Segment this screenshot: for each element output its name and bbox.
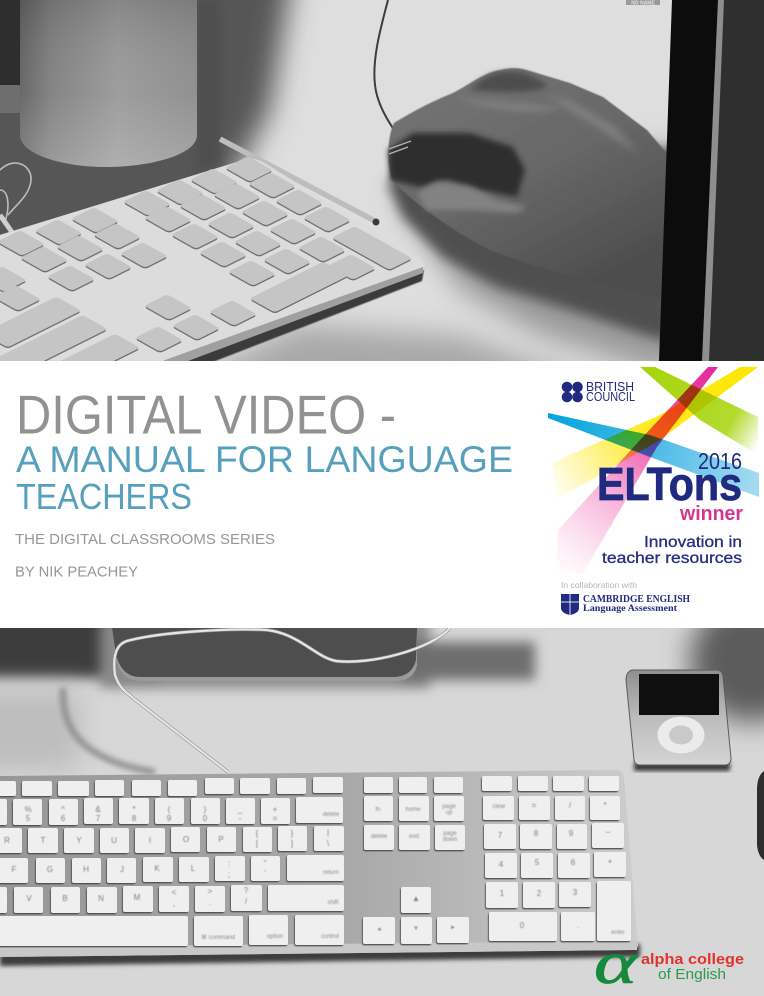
ELTons wordmark: [597, 448, 743, 525]
key legends: .: [209, 898, 211, 907]
key legends: shift: [327, 900, 339, 906]
award category: [602, 534, 742, 567]
key legends: +: [608, 857, 613, 866]
keyboard cable: [114, 628, 450, 772]
keys: [0, 157, 410, 361]
key legends: 4: [499, 860, 504, 869]
iPod: [626, 670, 731, 771]
key legends: 5: [535, 858, 540, 867]
key legends: N: [98, 894, 104, 903]
title: TEACHERS: [16, 476, 192, 517]
monitor edge: NO NAME: [631, 0, 655, 6]
key legends: ": [264, 859, 267, 868]
key legends: K: [154, 864, 160, 873]
key legends: V: [26, 894, 32, 903]
Alpha College of English logo: alpha college: [641, 952, 744, 968]
bottom keyboard: [0, 770, 638, 957]
key legends: &: [95, 805, 101, 814]
award category: Innovation in: [644, 534, 742, 551]
key legends: ;: [228, 870, 230, 879]
key legends: fn: [375, 807, 381, 813]
key legends: home: [405, 807, 421, 813]
key legends: }: [291, 829, 294, 838]
key legends: .: [577, 921, 579, 930]
key legends: enter: [611, 930, 625, 936]
key legends: Y: [76, 836, 82, 845]
key legends: 7: [96, 814, 101, 823]
key legends: ^: [61, 805, 65, 814]
key legends: J: [120, 865, 124, 874]
Cambridge English logo: Language Assessment: [583, 604, 678, 614]
key legends: clear: [492, 804, 506, 810]
key legends: G: [47, 865, 53, 874]
key legends: end: [409, 834, 419, 840]
key legends: [: [256, 839, 259, 848]
key legends: 9: [569, 829, 574, 838]
key legends: control: [321, 934, 339, 940]
badge colour bands: [548, 367, 759, 573]
hand shadow on desk: [387, 140, 680, 380]
Cambridge English logo: [561, 580, 690, 615]
key legends: ▲: [412, 894, 420, 903]
key legends: >: [208, 887, 213, 896]
key legends: delete: [323, 812, 340, 818]
key legends: U: [111, 836, 117, 845]
key legends: H: [83, 865, 89, 874]
title: A MANUAL FOR LANGUAGE: [16, 438, 513, 480]
key legends: [4, 801, 625, 941]
key legends: 6: [61, 814, 66, 823]
key legends: ⌘ command: [201, 934, 235, 941]
key legends: ►: [450, 925, 456, 931]
key legends: %: [24, 805, 32, 814]
key legends: down: [443, 837, 457, 843]
mug: [0, 0, 197, 167]
key legends: +: [273, 805, 278, 814]
key legends: page: [443, 831, 457, 837]
key legends: ': [264, 869, 266, 878]
key legends: ]: [291, 839, 293, 848]
key legends: 0: [520, 921, 525, 930]
key legends: B: [62, 894, 68, 903]
key legends: /: [245, 897, 248, 906]
award category: teacher resources: [602, 550, 742, 567]
key legends: 8: [132, 814, 137, 823]
series line: THE DIGITAL CLASSROOMS SERIES: [15, 532, 275, 548]
Cambridge English logo: In collaboration with: [561, 580, 637, 590]
keyboard shadow: [188, 270, 425, 361]
key legends: F: [12, 865, 17, 874]
earphones: [0, 163, 31, 235]
key legends: R: [4, 836, 10, 845]
ELTons wordmark: ELTons: [597, 458, 742, 510]
key legends: ◄: [376, 927, 382, 933]
British Council logo: COUNCIL: [586, 390, 635, 404]
key legends: delete: [371, 834, 388, 840]
dark object at edge: [757, 771, 764, 860]
key legends: ,: [173, 899, 175, 908]
key legends: page: [442, 804, 456, 810]
key legends: |: [327, 828, 329, 837]
Alpha College of English logo: α: [594, 930, 639, 996]
key legends: _: [237, 805, 243, 814]
key legends: 5: [26, 814, 31, 823]
key legends: ): [204, 805, 207, 814]
key legends: 7: [498, 831, 503, 840]
key legends: =: [273, 814, 278, 823]
key legends: *: [132, 805, 136, 814]
author line: BY NIK PEACHEY: [15, 564, 138, 580]
monitor edge: [626, 0, 764, 361]
key legends: P: [218, 835, 224, 844]
desk shadows: [0, 628, 764, 776]
top keyboard: [0, 156, 424, 382]
key legends: L: [191, 864, 196, 873]
key legends: O: [183, 835, 189, 844]
keys: [0, 776, 631, 946]
key legends: 1: [500, 889, 505, 898]
key legends: (: [168, 805, 171, 814]
title: [16, 384, 513, 517]
key legends: <: [172, 888, 177, 897]
title band: [0, 361, 764, 628]
key legends: 8: [534, 829, 539, 838]
pencil: [220, 139, 380, 226]
key legends: up: [446, 810, 453, 816]
key legends: −: [606, 828, 611, 837]
keyboard shadow: [0, 944, 640, 966]
mouse cable: [373, 0, 393, 129]
key legends: return: [323, 870, 339, 876]
key legends: :: [228, 859, 230, 868]
key legends: T: [41, 836, 46, 845]
Alpha College of English logo: of English: [658, 966, 726, 983]
top photo: keyboard, mouse and hand: [0, 0, 764, 400]
key legends: 9: [167, 814, 172, 823]
key legends: 0: [203, 814, 208, 823]
key legends: {: [256, 829, 259, 838]
key legends: 6: [571, 858, 576, 867]
key legends: ▼: [413, 926, 419, 932]
key legends: /: [569, 801, 572, 810]
key legends: \: [327, 839, 330, 848]
title: DIGITAL VIDEO -: [16, 384, 396, 446]
key legends: I: [149, 836, 151, 845]
key legends: ?: [244, 886, 249, 895]
key legends: *: [603, 801, 607, 810]
key legends: M: [134, 893, 141, 902]
monitor foot: [112, 628, 417, 681]
desk shadows: [0, 0, 568, 361]
British Council logo: [562, 380, 635, 404]
bottom photo: keyboard on desk with iPod: [0, 590, 764, 996]
key legends: option: [267, 934, 283, 940]
key legends: =: [532, 801, 537, 810]
ELTons wordmark: 2016: [698, 448, 742, 474]
key legends: 2: [537, 889, 542, 898]
Cambridge English logo: CAMBRIDGE ENGLISH: [583, 594, 690, 605]
hand and mouse: [384, 67, 666, 262]
key legends: -: [239, 814, 242, 823]
key legends: 3: [573, 888, 578, 897]
badge: British Council ELTons 2016 winner: [548, 367, 759, 615]
ELTons wordmark: winner: [679, 503, 743, 525]
British Council logo: BRITISH: [586, 380, 634, 394]
Alpha College of English logo: [596, 953, 744, 984]
